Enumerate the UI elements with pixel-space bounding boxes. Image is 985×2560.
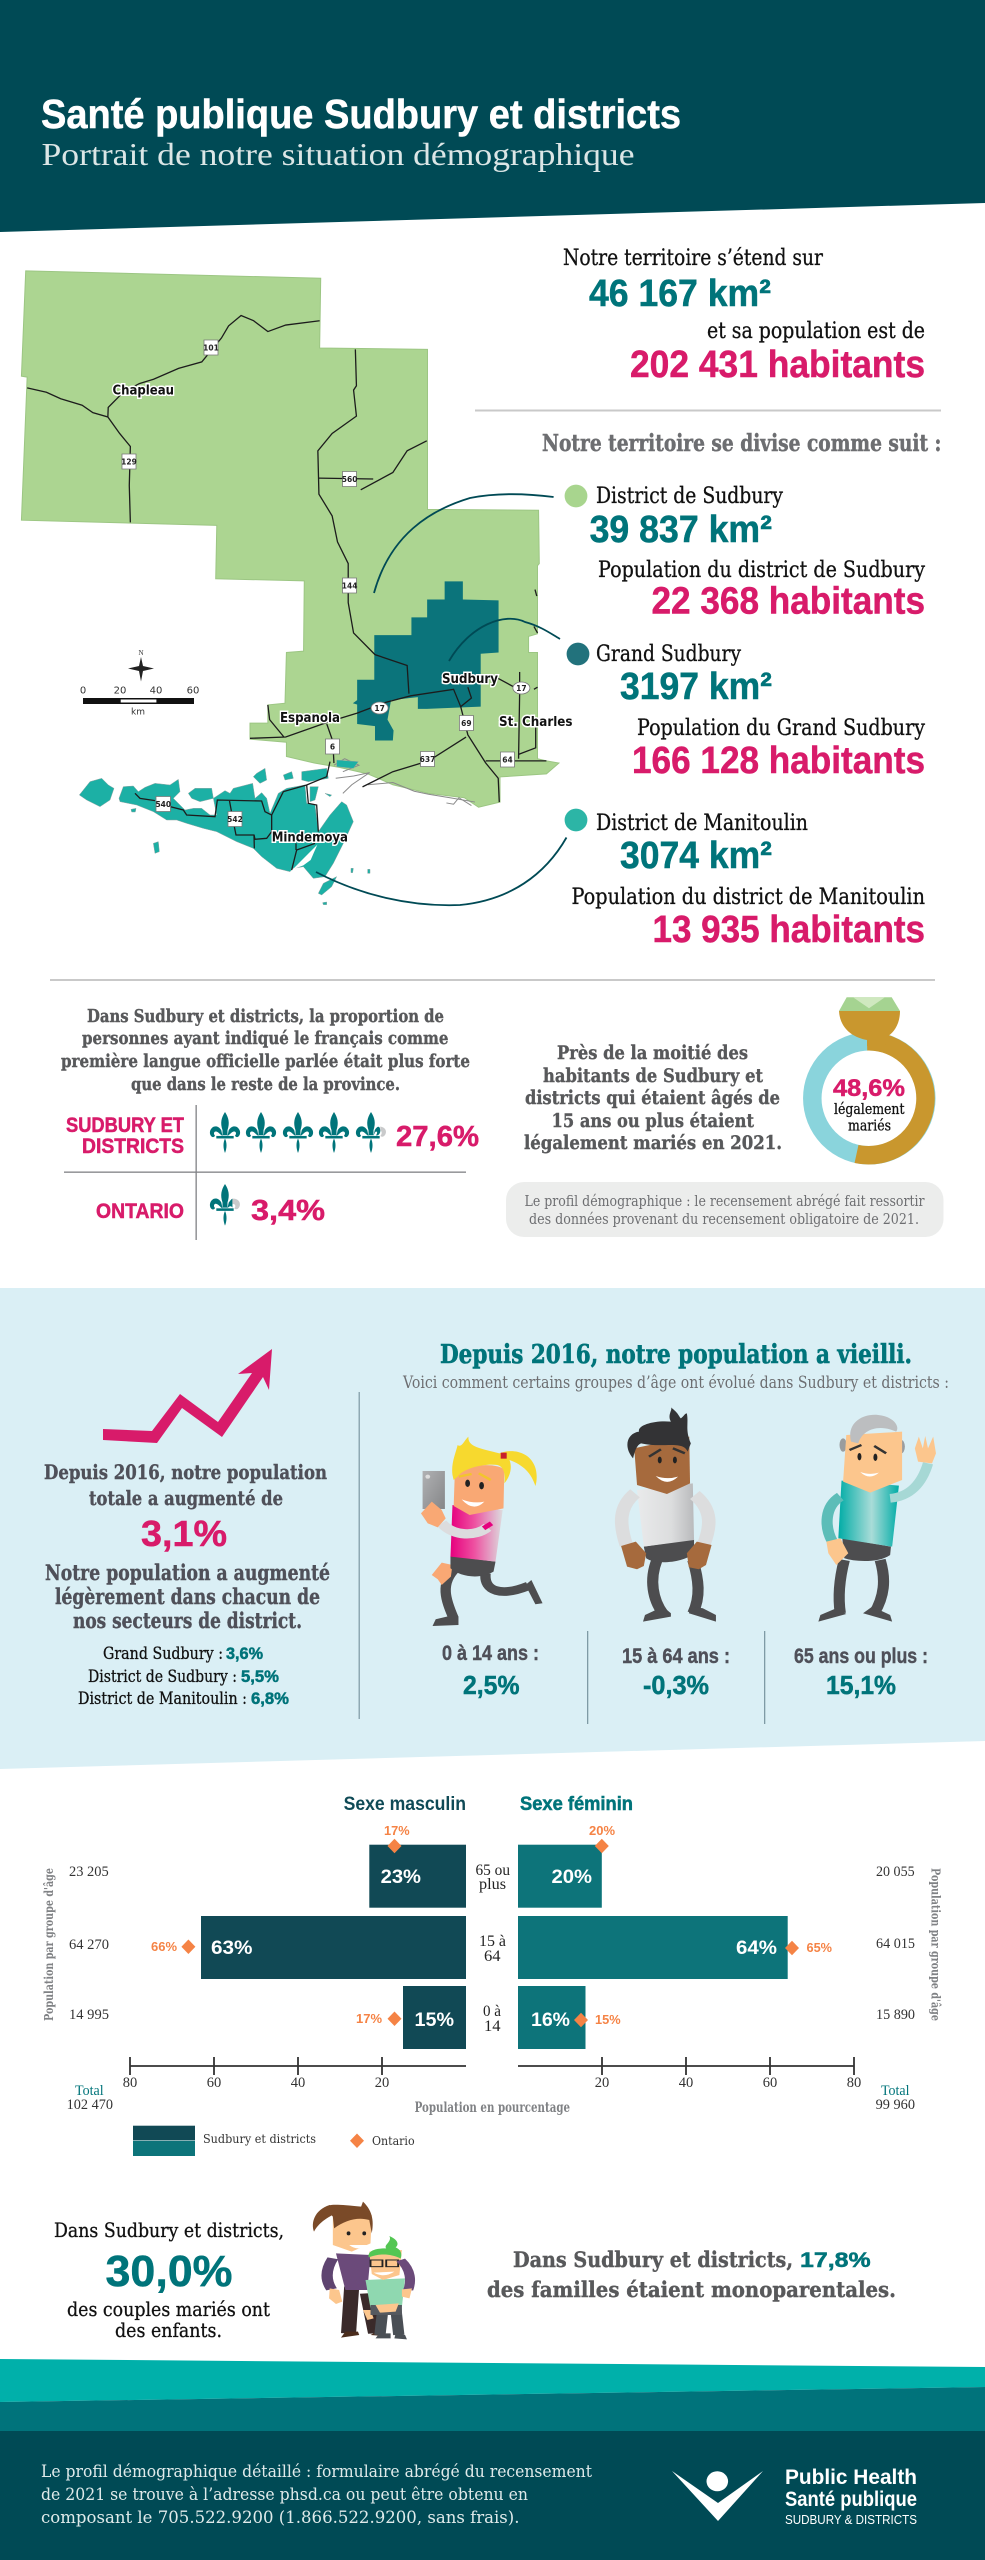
panel: French language bbox=[61, 1006, 479, 1240]
highway shields: 542 bbox=[227, 815, 243, 824]
bar value labels: 16% bbox=[531, 2010, 570, 2031]
totals right bbox=[876, 2083, 915, 2113]
region: district de Manitoulin bbox=[79, 760, 370, 905]
text block: French first language bbox=[61, 1006, 470, 1095]
age group labels: 15 à bbox=[479, 1933, 506, 1950]
population counts: 23 205 bbox=[69, 1864, 109, 1880]
panel: territory totals: 202 431 habitants bbox=[630, 344, 925, 386]
logo wordmark: Public Health bbox=[785, 2466, 917, 2489]
district growth list: 5,5% bbox=[241, 1668, 279, 1686]
axis tick labels: 20 bbox=[595, 2075, 609, 2091]
panel: territory totals: et sa population est de bbox=[707, 319, 925, 344]
label: Sudbury et districts bbox=[66, 1114, 184, 1158]
icon: rising arrow bbox=[103, 1349, 272, 1443]
age group stat: 15-64 bbox=[622, 1645, 730, 1700]
totals right: 99 960 bbox=[876, 2097, 915, 2113]
note pill bbox=[506, 1182, 944, 1237]
icon: older man waving bbox=[818, 1415, 936, 1622]
region: district de Sudbury bbox=[21, 271, 559, 807]
legend: Ontario bbox=[372, 2133, 415, 2148]
text block: married: Près de la moitié des bbox=[557, 1042, 748, 1064]
icon: parent and child bbox=[313, 2202, 412, 2339]
age group labels: 64 bbox=[484, 1948, 501, 1965]
population counts: 64 270 bbox=[69, 1937, 109, 1953]
logo wordmark bbox=[785, 2466, 917, 2527]
panel: territory totals bbox=[563, 246, 925, 386]
label: Ontario: ONTARIO bbox=[96, 1200, 184, 1223]
highway shields: 560 bbox=[342, 475, 357, 484]
lake shore detail bbox=[334, 759, 475, 806]
bar value labels: 63% bbox=[211, 1938, 253, 1959]
panel: couples with children: des couples mariés ont bbox=[67, 2297, 270, 2321]
Ontario value labels: 65% bbox=[806, 1940, 832, 1955]
icons: fleur-de-lis row bbox=[210, 1112, 386, 1153]
panel: Grand Sudbury: 166 128 habitants bbox=[632, 740, 925, 782]
Manitoulin highways bbox=[135, 762, 330, 870]
text block: married: habitants de Sudbury et bbox=[543, 1065, 763, 1087]
Ontario value labels: 17% bbox=[356, 2011, 382, 2026]
totals left bbox=[67, 2083, 113, 2113]
value: 3,4%: 3,4% bbox=[251, 1195, 325, 1227]
panel: district de Manitoulin: 13 935 habitants bbox=[652, 909, 925, 951]
axis tick labels bbox=[123, 2075, 861, 2091]
footer text: Le profil démographique détaillé : formulaire abrégé du recensement bbox=[41, 2462, 592, 2481]
panel: territory totals: Notre territoire s’étend sur bbox=[563, 246, 823, 271]
age group stat: 15-64: -0,3% bbox=[643, 1670, 709, 1700]
population counts bbox=[69, 1864, 915, 2023]
panel: lone-parent families: 17,8% bbox=[800, 2249, 871, 2272]
axis tick labels: 60 bbox=[207, 2075, 221, 2091]
icon: fleur-de-lis Ontario bbox=[210, 1184, 240, 1226]
panel: district de Manitoulin: District de Manitoulin bbox=[596, 811, 808, 836]
town labels bbox=[112, 382, 572, 846]
age group labels: 0 à bbox=[483, 2003, 501, 2020]
population counts: 20 055 bbox=[876, 1864, 915, 1880]
age group stat: 65+: 15,1% bbox=[826, 1670, 896, 1700]
panel: total growth: Notre population a augmenté bbox=[45, 1560, 330, 1585]
subtitle: Portrait de notre situation démographique bbox=[42, 136, 634, 172]
panel: district de Manitoulin: 3074 km² bbox=[620, 835, 772, 877]
axis tick labels: 20 bbox=[375, 2075, 389, 2091]
text block: French first language: première langue officielle parlée était plus forte bbox=[61, 1051, 470, 1072]
age group labels: 65 ou bbox=[476, 1862, 510, 1879]
donut ring chart bbox=[812, 997, 926, 1155]
text block: married: légalement mariés en 2021. bbox=[524, 1132, 782, 1154]
panel: lone-parent families: des familles étaient monoparentales. bbox=[487, 2277, 896, 2302]
town labels: Sudbury bbox=[442, 671, 498, 687]
text block: married bbox=[524, 1042, 782, 1154]
scale bar: 20 bbox=[114, 686, 126, 697]
header band bbox=[0, 0, 985, 232]
totals right: Total bbox=[881, 2083, 910, 2099]
donut ring chart: 48,6% bbox=[833, 1075, 905, 1102]
map regions bbox=[21, 271, 559, 807]
text block: French first language: que dans le reste de la province. bbox=[131, 1074, 400, 1095]
footer bands bbox=[0, 2359, 985, 2560]
age group stat: 0-14: 2,5% bbox=[463, 1670, 520, 1700]
footer text: composant le 705.522.9200 (1.866.522.9200, sans frais). bbox=[41, 2508, 520, 2527]
heading: male: Sexe masculin bbox=[344, 1794, 466, 1815]
town labels: Espanola bbox=[280, 710, 340, 726]
Ontario value labels: 15% bbox=[595, 2012, 621, 2027]
highway shields: 129 bbox=[121, 458, 137, 466]
panel: total growth: légèrement dans chacun de bbox=[55, 1584, 320, 1609]
scale bar: km bbox=[131, 708, 145, 718]
town labels: Chapleau bbox=[112, 382, 174, 398]
axis tick labels: 40 bbox=[679, 2075, 693, 2091]
age group labels: 14 bbox=[484, 2018, 501, 2035]
town labels: St. Charles bbox=[499, 714, 572, 730]
text block: French first language: personnes ayant indiqué le français comme bbox=[82, 1028, 448, 1049]
axis label right: Population par groupe d'âge bbox=[928, 1868, 942, 2021]
axis tick labels: 80 bbox=[847, 2075, 861, 2091]
footer text: de 2021 se trouve à l’adresse phsd.ca ou peut être obtenu en bbox=[41, 2485, 528, 2504]
donut ring chart: légalement bbox=[834, 1100, 904, 1118]
highway shields: 64 bbox=[502, 756, 513, 765]
Ontario value labels: 20% bbox=[589, 1823, 615, 1838]
bar value labels bbox=[211, 1867, 777, 2031]
panel: district de Sudbury: 39 837 km² bbox=[590, 509, 772, 551]
age group stat: 65+: 65 ans ou plus : bbox=[794, 1645, 928, 1668]
highway shields: 17 bbox=[516, 684, 527, 693]
scale bar: 0 bbox=[80, 686, 86, 697]
panel: district de Sudbury bbox=[565, 484, 925, 623]
panel: population has aged bbox=[402, 1340, 949, 1724]
label: Sudbury et districts: SUDBURY ET bbox=[66, 1114, 184, 1137]
age group stat: 0-14: 0 à 14 ans : bbox=[442, 1642, 539, 1665]
highway shields: 144 bbox=[342, 582, 357, 591]
totals left: 102 470 bbox=[67, 2097, 113, 2113]
connector arcs bbox=[316, 494, 566, 905]
highway shields: 540 bbox=[155, 800, 171, 809]
panel: couples with children bbox=[54, 2218, 284, 2342]
highway shields: 6 bbox=[330, 743, 335, 752]
Ontario value labels bbox=[151, 1823, 832, 2027]
logo: Public Health bbox=[672, 2466, 917, 2527]
Ontario value labels: 17% bbox=[384, 1823, 410, 1838]
age group stat: 15-64: 15 à 64 ans : bbox=[622, 1645, 730, 1668]
bar value labels: 15% bbox=[414, 2010, 454, 2031]
axis tick labels: 60 bbox=[763, 2075, 777, 2091]
panel: total growth: 3,1% bbox=[141, 1513, 227, 1554]
highway shields bbox=[121, 340, 530, 826]
note pill: Le profil démographique : le recensement abrégé fait ressortir bbox=[524, 1194, 925, 1210]
logo wordmark: Santé publique bbox=[785, 2488, 917, 2511]
panel: married bbox=[506, 997, 944, 1237]
text block: married: 15 ans ou plus étaient bbox=[552, 1110, 754, 1132]
panel: lone-parent families bbox=[487, 2247, 896, 2302]
Ontario diamond markers bbox=[181, 1839, 799, 2027]
scale bar bbox=[80, 686, 199, 718]
panel: total growth: nos secteurs de district. bbox=[73, 1608, 302, 1633]
label: Sudbury et districts: DISTRICTS bbox=[82, 1135, 184, 1158]
age group stat: 0-14 bbox=[442, 1642, 539, 1700]
logo mark bbox=[672, 2471, 763, 2521]
panel: Grand Sudbury: 3197 km² bbox=[620, 666, 772, 708]
scale bar: 40 bbox=[150, 686, 162, 697]
panel: total growth bbox=[44, 1460, 330, 1708]
text block: married: districts qui étaient âgés de bbox=[525, 1087, 780, 1109]
population counts: 64 015 bbox=[876, 1936, 915, 1952]
panel: couples with children: Dans Sudbury et districts, bbox=[54, 2218, 284, 2242]
donut ring chart: mariés bbox=[848, 1117, 891, 1135]
district growth list: District de Sudbury : bbox=[88, 1667, 237, 1686]
district growth list bbox=[78, 1644, 289, 1708]
panel: Grand Sudbury bbox=[567, 642, 925, 782]
highway shields: 17 bbox=[374, 704, 385, 713]
title: Santé publique Sudbury et districts bbox=[41, 91, 681, 137]
panel: Grand Sudbury: Population du Grand Sudbury bbox=[637, 716, 925, 741]
highway shields: 637 bbox=[420, 755, 435, 764]
bar value labels: 23% bbox=[381, 1867, 421, 1888]
bars bbox=[201, 1845, 788, 2049]
panel: population change background bbox=[0, 1288, 985, 1769]
population counts: 15 890 bbox=[876, 2007, 915, 2023]
totals left: Total bbox=[75, 2083, 104, 2099]
district growth list: Grand Sudbury : bbox=[103, 1644, 223, 1663]
bar value labels: 20% bbox=[552, 1867, 592, 1888]
scale bar: 60 bbox=[187, 686, 199, 697]
chart: population pyramid bbox=[42, 1794, 942, 2156]
axis tick labels: 80 bbox=[123, 2075, 137, 2091]
panel: district de Sudbury: District de Sudbury bbox=[596, 484, 783, 509]
panel: total growth: totale a augmenté de bbox=[89, 1486, 283, 1510]
value: 27,6%: 27,6% bbox=[396, 1121, 479, 1153]
compass rose: N bbox=[138, 649, 144, 657]
x axis title: Population en pourcentage bbox=[415, 2100, 570, 2116]
town labels: Mindemoya bbox=[272, 830, 348, 846]
panel: couples with children: 30,0% bbox=[106, 2247, 232, 2296]
panel: district de Sudbury: 22 368 habitants bbox=[652, 581, 925, 623]
axis tick labels: 40 bbox=[291, 2075, 305, 2091]
axis label left: Population par groupe d'âge bbox=[42, 1868, 56, 2021]
icon: young man bbox=[621, 1407, 716, 1622]
logo wordmark: SUDBURY & DISTRICTS bbox=[785, 2512, 917, 2527]
highways bbox=[27, 316, 546, 802]
highway shields: 69 bbox=[461, 719, 472, 728]
age group labels bbox=[476, 1862, 510, 2035]
panel: couples with children: des enfants. bbox=[115, 2318, 222, 2342]
panel: territory totals: 46 167 km² bbox=[589, 273, 771, 315]
x axes bbox=[130, 2057, 854, 2075]
note pill: des données provenant du recensement obligatoire de 2021. bbox=[529, 1212, 919, 1228]
panel: lone-parent families: Dans Sudbury et districts, bbox=[513, 2247, 793, 2272]
legend bbox=[133, 2126, 415, 2156]
bay channel bbox=[293, 845, 317, 869]
highway shields: 101 bbox=[203, 344, 219, 352]
heading: female: Sexe féminin bbox=[520, 1794, 633, 1815]
panel: district de Manitoulin bbox=[565, 809, 925, 951]
icon: girl with phone bbox=[421, 1437, 543, 1626]
Ontario value labels: 66% bbox=[151, 1939, 177, 1954]
text block: French first language: Dans Sudbury et districts, la proportion de bbox=[87, 1006, 444, 1027]
footer text bbox=[41, 2462, 592, 2527]
panel: territory map bbox=[21, 271, 572, 905]
region: Grand Sudbury bbox=[353, 581, 499, 740]
panel: district de Sudbury: Population du district de Sudbury bbox=[598, 558, 925, 583]
legend: Sudbury et districts bbox=[203, 2131, 316, 2146]
district growth list: District de Manitoulin : bbox=[78, 1689, 247, 1708]
bar value labels: 64% bbox=[736, 1938, 777, 1959]
district growth list: 3,6% bbox=[226, 1645, 263, 1663]
compass rose bbox=[128, 649, 154, 682]
panel: Grand Sudbury: Grand Sudbury bbox=[596, 642, 741, 667]
district growth list: 6,8% bbox=[251, 1690, 289, 1708]
panel: district de Manitoulin: Population du district de Manitoulin bbox=[572, 885, 925, 910]
panel: total growth: Depuis 2016, notre population bbox=[44, 1460, 327, 1484]
age group stat: 65+ bbox=[794, 1645, 928, 1700]
population counts: 14 995 bbox=[69, 2007, 109, 2023]
age group labels: plus bbox=[479, 1876, 506, 1893]
